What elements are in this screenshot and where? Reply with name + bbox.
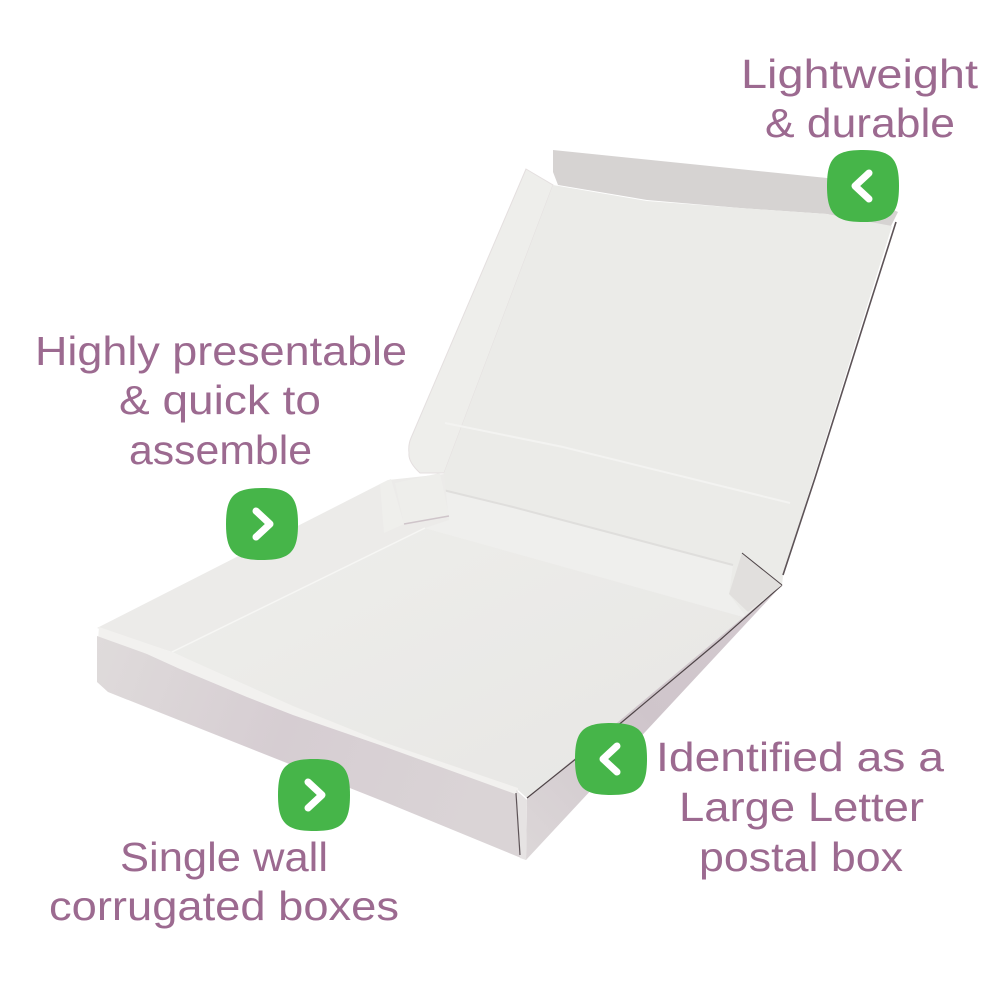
- text: highly presentable: Highly presentable: [35, 328, 407, 374]
- text: highly presentable: & quick to: [119, 377, 321, 423]
- illustration: open postal box: [97, 150, 898, 860]
- text: single wall: [49, 834, 399, 929]
- text: highly presentable: [35, 328, 407, 473]
- text: large letter: Large Letter: [679, 784, 924, 830]
- text: single wall: Single wall: [120, 834, 328, 880]
- text: highly presentable: assemble: [129, 427, 312, 473]
- corner tab left: [395, 473, 449, 524]
- lid dark edge: [783, 222, 896, 575]
- lid inner panel and back wall: [425, 185, 892, 618]
- dark rim edge: [527, 585, 782, 798]
- front rim highlight: [98, 627, 518, 796]
- text: single wall: corrugated boxes: [49, 883, 399, 929]
- base floor: [172, 528, 747, 798]
- crease between left wall and floor: [172, 528, 425, 652]
- text: lightweight and durable: & durable: [765, 100, 955, 146]
- lid back flap: [553, 150, 898, 228]
- right wall: [526, 585, 782, 860]
- text: lightweight and durable: Lightweight: [741, 51, 979, 97]
- icon: arrow badge left: [226, 488, 298, 560]
- text: large letter: [656, 734, 944, 880]
- icon: arrow badge top right: [827, 150, 899, 222]
- icon: arrow badge bottom right: [575, 723, 647, 795]
- lid crease: [445, 423, 790, 503]
- lid side flap: [409, 169, 553, 473]
- front corner: [516, 790, 527, 860]
- back wall lower panel: [425, 490, 747, 618]
- text: large letter: Identified as a: [656, 734, 944, 780]
- text: large letter: postal box: [699, 834, 904, 880]
- icon: arrow badge bottom left: [278, 759, 350, 831]
- base left wall inner: [97, 474, 449, 652]
- front wall: [97, 636, 526, 860]
- corner tab right: [729, 553, 782, 612]
- text: lightweight and durable: [741, 51, 979, 146]
